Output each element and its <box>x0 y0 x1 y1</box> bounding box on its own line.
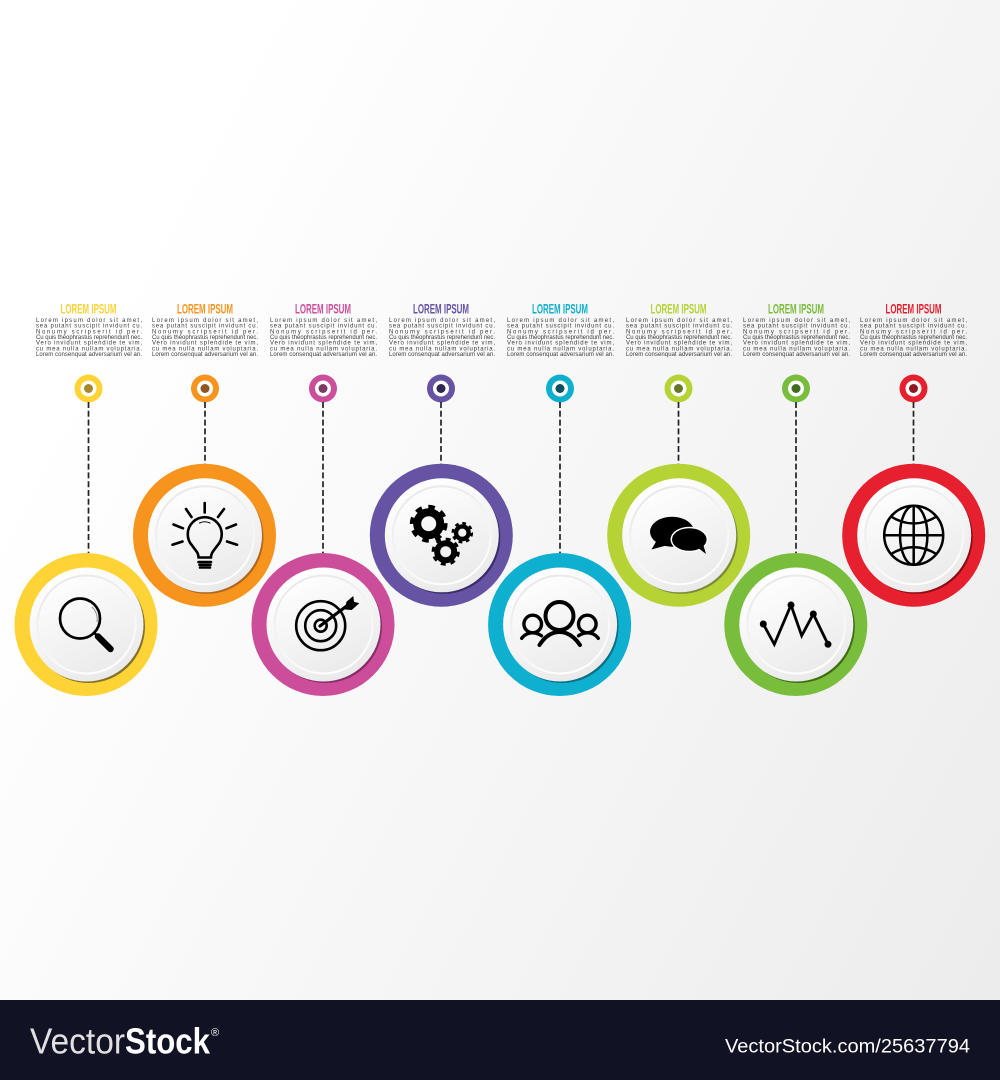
icon: speech bubbles <box>650 517 708 554</box>
text block: Lorem consenquat adversarium vel an. <box>743 352 850 358</box>
text block: Vero invidunt splendide te vim, <box>743 341 850 347</box>
heading: LOREM IPSUM <box>886 300 942 316</box>
text block: Cu quis theophrastus reprehendunt nec. <box>860 335 967 341</box>
ring <box>842 464 985 607</box>
icon: people group <box>522 602 598 645</box>
marker dot <box>191 374 219 402</box>
marker dot <box>427 374 455 402</box>
text block: Nonumy scripserit id per. <box>860 329 967 335</box>
text block: Lorem consenquat adversarium vel an. <box>36 352 142 358</box>
text block <box>270 318 377 358</box>
text block: Cu quis theophrastus reprehendunt nec. <box>743 335 850 341</box>
watermark logo: Vector <box>30 1020 125 1061</box>
text block: Vero invidunt splendide te vim, <box>36 341 142 347</box>
marker dot <box>74 374 102 402</box>
text block: Nonumy scripserit id per. <box>626 329 732 335</box>
text block: Cu quis theophrastus reprehendunt nec. <box>507 335 614 341</box>
heading: LOREM IPSUM <box>295 300 351 316</box>
text block: Lorem ipsum dolor sit amet, <box>860 318 967 324</box>
text block: Vero invidunt splendide te vim, <box>270 341 377 347</box>
text block: Lorem consenquat adversarium vel an. <box>152 352 258 358</box>
watermark logo <box>30 1020 219 1061</box>
text block: Nonumy scripserit id per. <box>507 329 614 335</box>
icon: target with arrow <box>296 596 359 650</box>
footer bar <box>0 1000 1000 1080</box>
text block: Cu quis theophrastus reprehendunt nec. <box>152 335 258 341</box>
icon: light bulb <box>172 503 237 568</box>
text block: cu mea nulla nullam voluptaria. <box>507 346 614 352</box>
text block: cu mea nulla nullam voluptaria. <box>36 346 142 352</box>
panel: step 8 globe <box>842 300 985 607</box>
watermark url: VectorStock.com/25637794 <box>725 1037 970 1058</box>
dashed connector <box>204 402 206 464</box>
text block: Vero invidunt splendide te vim, <box>389 341 495 347</box>
text block: sea putant suscipit invidunt cu. <box>270 324 377 330</box>
text block: Lorem ipsum dolor sit amet, <box>389 318 495 324</box>
ring <box>488 553 631 696</box>
text block: Lorem ipsum dolor sit amet, <box>152 318 258 324</box>
icon: magnifying glass <box>60 598 110 649</box>
text block: sea putant suscipit invidunt cu. <box>152 324 258 330</box>
panel: step 1 search <box>14 300 158 696</box>
dashed connector <box>88 402 90 553</box>
text block: cu mea nulla nullam voluptaria. <box>626 346 732 352</box>
text block: sea putant suscipit invidunt cu. <box>743 324 850 330</box>
text block: sea putant suscipit invidunt cu. <box>389 324 495 330</box>
text block <box>152 318 258 358</box>
text block <box>36 318 142 358</box>
text block: Lorem ipsum dolor sit amet, <box>507 318 614 324</box>
text block: Vero invidunt splendide te vim, <box>860 341 967 347</box>
watermark logo: Stock <box>125 1020 211 1061</box>
ring <box>133 464 276 607</box>
marker dot <box>309 374 337 402</box>
panel: step 5 team <box>488 300 631 696</box>
text block: cu mea nulla nullam voluptaria. <box>389 346 495 352</box>
ring <box>724 553 867 696</box>
text block: Cu quis theophrastus reprehendunt nec. <box>36 335 142 341</box>
text block: Lorem consenquat adversarium vel an. <box>389 352 495 358</box>
text block: Vero invidunt splendide te vim, <box>507 341 614 347</box>
text block: cu mea nulla nullam voluptaria. <box>270 346 377 352</box>
marker dot <box>900 374 928 402</box>
text block: Nonumy scripserit id per. <box>389 329 495 335</box>
text block: Lorem consenquat adversarium vel an. <box>270 352 377 358</box>
text block: cu mea nulla nullam voluptaria. <box>860 346 967 352</box>
dashed connector <box>559 402 561 553</box>
text block: Lorem consenquat adversarium vel an. <box>860 352 967 358</box>
marker dot <box>782 374 810 402</box>
text block: Lorem ipsum dolor sit amet, <box>36 318 142 324</box>
icon: line chart <box>760 602 832 648</box>
text block: Nonumy scripserit id per. <box>270 329 377 335</box>
text block: Lorem consenquat adversarium vel an. <box>507 352 614 358</box>
text block: Nonumy scripserit id per. <box>152 329 258 335</box>
text block: sea putant suscipit invidunt cu. <box>36 324 142 330</box>
text block: Vero invidunt splendide te vim, <box>152 341 258 347</box>
ring <box>370 464 513 607</box>
marker dot <box>664 374 692 402</box>
dashed connector <box>795 402 797 553</box>
text block: cu mea nulla nullam voluptaria. <box>743 346 850 352</box>
text block: Lorem ipsum dolor sit amet, <box>743 318 850 324</box>
text block: Nonumy scripserit id per. <box>743 329 850 335</box>
panel: step 6 chat <box>607 300 750 607</box>
text block: Cu quis theophrastus reprehendunt nec. <box>270 335 377 341</box>
icon: gears <box>412 507 472 564</box>
text block <box>743 318 850 358</box>
dashed connector <box>912 402 914 464</box>
text block: sea putant suscipit invidunt cu. <box>507 324 614 330</box>
text block: Lorem ipsum dolor sit amet, <box>626 318 732 324</box>
text block: sea putant suscipit invidunt cu. <box>860 324 967 330</box>
ring <box>14 553 158 696</box>
text block: sea putant suscipit invidunt cu. <box>626 324 732 330</box>
panel: step 4 settings <box>370 300 513 607</box>
marker dot <box>546 374 574 402</box>
text block: Cu quis theophrastus reprehendunt nec. <box>389 335 495 341</box>
text block: Lorem consenquat adversarium vel an. <box>626 352 732 358</box>
heading: LOREM IPSUM <box>532 300 588 316</box>
text block: Cu quis theophrastus reprehendunt nec. <box>626 335 732 341</box>
heading: LOREM IPSUM <box>650 300 706 316</box>
panel: step 2 idea <box>133 300 276 607</box>
text block <box>389 318 495 358</box>
watermark logo: ® <box>211 1027 219 1039</box>
text block: Lorem ipsum dolor sit amet, <box>270 318 377 324</box>
panel: step 7 chart <box>724 300 867 696</box>
heading: LOREM IPSUM <box>768 300 824 316</box>
text block <box>626 318 732 358</box>
dashed connector <box>322 402 324 553</box>
text block: Nonumy scripserit id per. <box>36 329 142 335</box>
ring <box>252 553 394 696</box>
text block <box>507 318 614 358</box>
dashed connector <box>440 402 442 464</box>
heading: LOREM IPSUM <box>413 300 469 316</box>
dashed connector <box>678 402 680 464</box>
panel: step 3 target <box>252 300 394 696</box>
heading: LOREM IPSUM <box>177 300 233 316</box>
text block <box>860 318 967 358</box>
heading: LOREM IPSUM <box>60 300 116 316</box>
text block: Vero invidunt splendide te vim, <box>626 341 732 347</box>
ring <box>607 464 750 607</box>
text block: cu mea nulla nullam voluptaria. <box>152 346 258 352</box>
icon: globe <box>884 506 943 565</box>
